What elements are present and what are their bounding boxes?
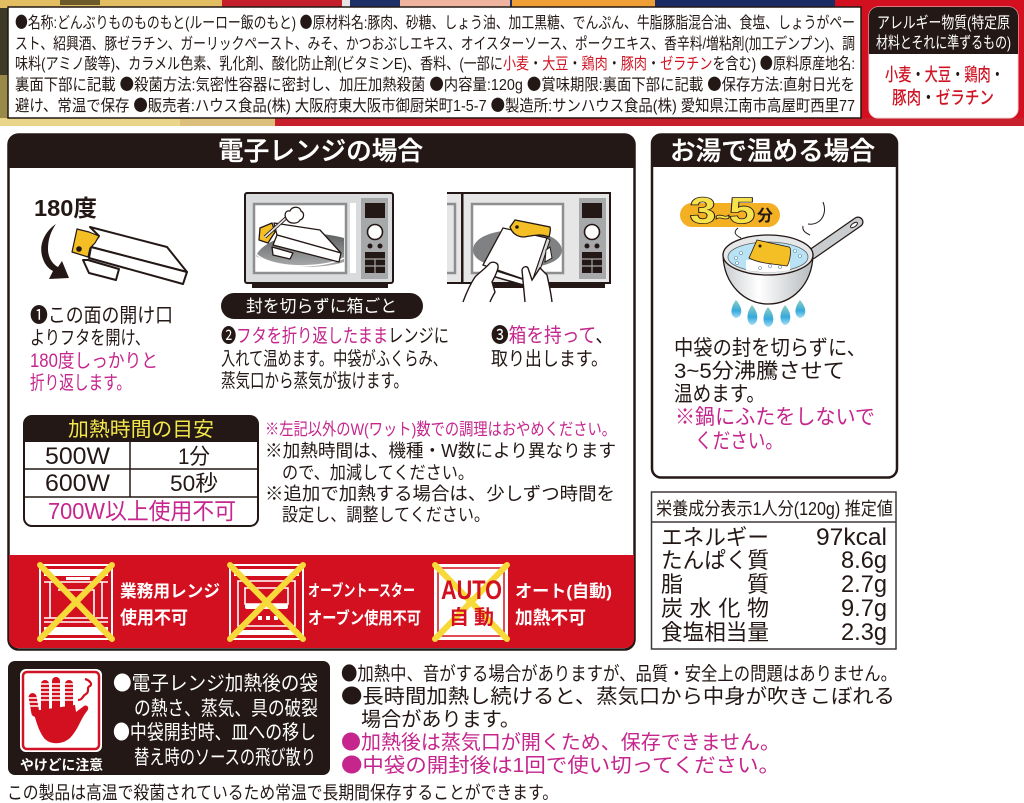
hot water instructions: 温めます。: [674, 383, 765, 406]
table: nutrition facts: エネルギー: [661, 525, 769, 550]
panel: microwave: [8, 134, 634, 650]
ingredient information panel: ●名称:どんぶりものものもと(ルーロー飯のもと) ●原材料名:豚肉、砂糖、しょう油、加工黒糖、でんぷん、牛脂豚脂混合油、食塩、しょうがペー: [15, 9, 855, 33]
table: heating time: 500W: [45, 443, 110, 470]
icon: no auto heating: [435, 565, 507, 639]
table: heating time: 50秒: [170, 471, 218, 496]
table: nutrition facts: 2.3g: [841, 619, 887, 646]
arrow: fold direction: [41, 224, 69, 279]
icon: no commercial microwave: [40, 565, 112, 639]
panel: burn warning: [8, 661, 330, 775]
label: toaster oven not allowed: オーブン使用不可: [308, 608, 421, 628]
label: auto heating not allowed: 加熱不可: [515, 608, 586, 628]
table: heating time: 600W: [45, 470, 110, 497]
label: toaster oven not allowed: [308, 581, 421, 628]
step 2 text: 入れて温めます。中袋がふくらみ、: [221, 348, 447, 370]
step 1 text: 折り返します。: [30, 372, 131, 394]
warning band: [9, 555, 634, 648]
background photo strip: [0, 0, 1024, 126]
step 2 text: [221, 321, 449, 392]
table: nutrition facts: 9.7g: [841, 595, 887, 622]
badge: 3 to 5 minutes: 分: [757, 207, 773, 225]
table: heating time: [24, 416, 258, 526]
table: nutrition facts: 脂: [661, 572, 683, 597]
table: nutrition facts: 2.7g: [841, 571, 887, 598]
heating notes: ※左記以外のW(ワット)数での調理はおやめください。: [265, 420, 616, 439]
table: nutrition facts: たんぱく質: [661, 548, 769, 573]
badge: 3 to 5 minutes: 3 ~5: [690, 190, 755, 231]
step 1 text: 180度しっかりと: [30, 350, 158, 372]
heating notes: 設定し、調整してください。: [282, 505, 490, 525]
table: nutrition facts: 8.6g: [841, 547, 887, 574]
hot water instructions: 3~5分沸騰させて: [674, 360, 845, 383]
label: toaster oven not allowed: オーブントースター: [308, 581, 415, 600]
illustration: removing box from microwave: [447, 192, 610, 302]
table: nutrition facts: 食塩相当量: [661, 620, 769, 645]
cautions text: ●加熱中、音がする場合がありますが、品質・安全上の問題はありません。: [341, 659, 897, 686]
table: nutrition facts: [651, 492, 896, 649]
label: beware of burns: やけどに注意: [20, 757, 103, 773]
microwave heading: 電子レンジの場合: [218, 136, 423, 166]
icon: pot on flame: [723, 202, 858, 327]
step 3 text: 取り出します。: [491, 348, 608, 370]
label: 180 degrees: 180度: [34, 195, 97, 221]
panel: hot water: [651, 134, 897, 478]
step 3 text: ❸箱を持って、: [491, 319, 613, 348]
table: nutrition facts: 質: [747, 572, 769, 597]
step 2 text: 蒸気口から蒸気が抜けます。: [221, 370, 408, 392]
hot water instructions: [674, 337, 875, 453]
allergen panel: [869, 7, 1018, 118]
icon: no oven toaster: [230, 565, 303, 639]
burn warning text: の熱さ、蒸気、具の破裂: [134, 697, 318, 720]
label: commercial microwave not allowed: [120, 582, 220, 628]
allergen panel: 小麦・大豆・鶏肉・: [885, 65, 1004, 85]
step 1 text: [30, 299, 173, 394]
footer note: この製品は高温で殺菌されているため常温で長期間保存することができます。: [7, 783, 558, 803]
table: heating time: 700W以上使用不可: [48, 498, 236, 524]
icon: opened box: [72, 227, 187, 284]
burn warning text: ●電子レンジ加熱後の袋: [113, 667, 318, 696]
table: nutrition facts: 97kcal: [816, 524, 887, 551]
step 1 text: よりフタを開け、: [30, 327, 150, 349]
label: commercial microwave not allowed: 業務用レンジ: [120, 582, 220, 601]
cautions text: ●加熱後は蒸気口が開くため、保存できません。: [341, 726, 780, 755]
ingredient information panel: 避け、常温で保存 ●販売者:ハウス食品(株) 大阪府東大阪市御厨栄町1-5-7 ●製造所:サンハウス食品(株) 愛知県江南市高屋町西里77: [15, 92, 855, 116]
label: auto heating not allowed: [515, 581, 612, 628]
step 2 text: ❷フタを折り返したままレンジに: [221, 321, 449, 348]
table: nutrition facts: 栄養成分表示1人分(120g) 推定値: [656, 499, 893, 519]
cautions text: 場合があります。: [361, 708, 520, 731]
table: heating time: 1分: [178, 444, 210, 469]
table: nutrition facts: 炭水化物: [661, 596, 769, 621]
label: auto heating not allowed: オート(自動): [515, 581, 612, 601]
pill: keep box sealed: 封を切らずに箱ごと: [246, 297, 397, 316]
hot water instructions: 中袋の封を切らずに、: [674, 337, 866, 360]
heating notes: ※追加で加熱する場合は、少しずつ時間を: [265, 484, 615, 504]
step 1 text: ❶この面の開け口: [30, 299, 173, 328]
step 3 text: [491, 319, 613, 370]
table: heating time: 加熱時間の目安: [68, 418, 214, 441]
cautions text: ●中袋の開封後は1回で使い切ってください。: [341, 749, 780, 778]
icon: no auto heating: AUTO: [441, 575, 502, 605]
hot water instructions: ※鍋にふたをしないで: [675, 406, 875, 429]
pill: keep box sealed: [221, 293, 423, 319]
ingredient information panel: 味料(アミノ酸等)、カラメル色素、乳化剤、酸化防止剤(ビタミンE)、香料、(一部に小麦・大豆・鶏肉・豚肉・ゼラチンを含む) ●原料原産地名:: [15, 50, 855, 74]
badge: 3 to 5 minutes: [680, 190, 780, 231]
heating notes: ※加熱時間は、機種・W数により異なります: [265, 441, 616, 461]
ingredient information panel: 裏面下部に記載 ●殺菌方法:気密性容器に密封し、加圧加熱殺菌 ●内容量:120g ●賞味期限:裏面下部に記載 ●保存方法:直射日光を: [15, 71, 855, 95]
illustration: microwave with box: [245, 193, 393, 288]
heating notes: ので、加減してください。: [282, 463, 474, 483]
ingredient information panel: [8, 7, 861, 118]
hot water instructions: ください。: [695, 430, 783, 453]
icon: no auto heating: 自動: [449, 606, 494, 629]
hot water heading: お湯で温める場合: [670, 136, 875, 166]
label: commercial microwave not allowed: 使用不可: [120, 608, 188, 628]
icon: burn hand: [20, 669, 102, 752]
burn warning text: ●中袋開封時、皿への移し: [113, 716, 316, 745]
allergen panel: 豚肉・ゼラチン: [892, 88, 994, 108]
heating notes: [265, 420, 616, 525]
cautions text: [341, 659, 897, 778]
cautions text: ●長時間加熱し続けると、蒸気口から中身が吹きこぼれる: [341, 680, 895, 709]
burn warning text: 替え時のソースの飛び散り: [134, 746, 316, 769]
burn warning text: [113, 667, 318, 769]
